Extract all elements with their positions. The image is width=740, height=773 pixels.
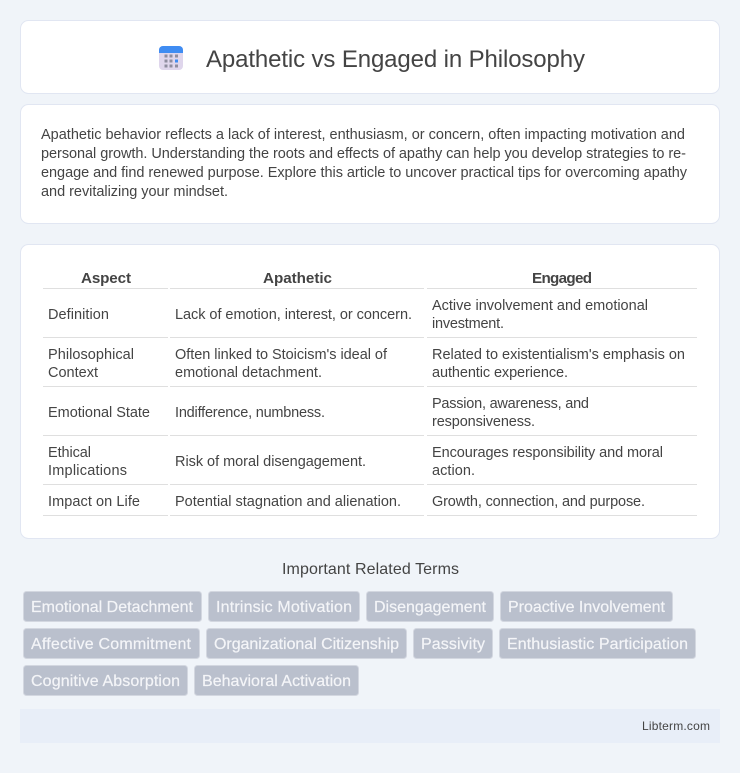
table header: Engaged [532, 270, 592, 287]
table row: philosophical context: authentic experience. [432, 365, 568, 381]
table header: Apathetic [263, 270, 332, 287]
tag [500, 592, 672, 622]
table row: definition: Definition [48, 307, 109, 323]
table row: philosophical context: Context [48, 365, 98, 381]
table header: Aspect [81, 270, 131, 287]
table row: emotional state: Passion, awareness, and [432, 396, 589, 412]
table row: impact on life: Impact on Life [48, 494, 140, 510]
table row: impact on life: Growth, connection, and purpose. [432, 494, 645, 510]
tag [24, 592, 202, 622]
tag: Cognitive Absorption [31, 673, 180, 690]
title: Apathetic vs Engaged in Philosophy [206, 46, 585, 73]
table row: philosophical context: Often linked to Stoicism's ideal of [175, 347, 388, 363]
table row: philosophical context [48, 347, 685, 381]
table row: emotional state: Emotional State [48, 405, 150, 421]
tag: Proactive Involvement [508, 599, 666, 616]
table row: ethical implications: Ethical [48, 445, 91, 461]
tag: Disengagement [374, 599, 487, 616]
table row: philosophical context: emotional detachment. [175, 365, 322, 381]
table row: definition: Active involvement and emotional [432, 298, 648, 314]
tag [366, 592, 494, 622]
table row: emotional state: Indifference, numbness. [175, 405, 325, 421]
table row: ethical implications: Implications [48, 463, 127, 479]
tag: Behavioral Activation [202, 673, 351, 690]
tag [24, 628, 200, 658]
table row: definition [48, 298, 648, 332]
tag: Organizational Citizenship [214, 636, 399, 653]
tag: Passivity [421, 636, 485, 653]
table header [81, 270, 592, 287]
related terms tags [24, 592, 696, 696]
tag: Enthusiastic Participation [507, 636, 688, 653]
icon: calendar [159, 46, 183, 70]
table row: emotional state: responsiveness. [432, 414, 535, 430]
text block: introduction: personal growth. Understanding the roots and effects of apathy can help you develop strategies to re- [41, 146, 686, 162]
table row: ethical implications [48, 445, 663, 479]
tag: Emotional Detachment [31, 599, 194, 616]
table row: ethical implications: Encourages responsibility and moral [432, 445, 663, 461]
table row: philosophical context: Related to existentialism's emphasis on [432, 347, 685, 363]
panel: introduction [20, 104, 720, 224]
table row: ethical implications: action. [432, 463, 475, 479]
panel: header [20, 20, 720, 94]
table row: impact on life: Potential stagnation and alienation. [175, 494, 401, 510]
heading: important related terms: Important Related Terms [282, 561, 459, 578]
table row: philosophical context: Philosophical [48, 347, 134, 363]
tag [206, 628, 406, 658]
table row: impact on life [48, 494, 645, 510]
tag [414, 628, 492, 658]
table row: ethical implications: Risk of moral disengagement. [175, 454, 366, 470]
tag [24, 666, 188, 696]
text block: introduction: Apathetic behavior reflects a lack of interest, enthusiasm, or concern, often impacting motivation and [41, 127, 685, 143]
footer [20, 709, 720, 743]
tag [500, 628, 696, 658]
tag [208, 592, 360, 622]
text block: introduction [41, 127, 688, 200]
panel: comparison table [20, 244, 720, 538]
text block: introduction: engage and find renewed purpose. Explore this article to uncover practical tips for overcoming apathy [41, 165, 688, 181]
table row: definition: Lack of emotion, interest, or concern. [175, 307, 412, 323]
tag [194, 666, 358, 696]
footer credit: Libterm.com [642, 719, 710, 733]
tag: Intrinsic Motivation [216, 599, 352, 616]
table row: definition: investment. [432, 316, 504, 332]
table row: emotional state [48, 396, 589, 430]
text block: introduction: and revitalizing your mindset. [41, 184, 228, 200]
tag: Affective Commitment [31, 636, 192, 653]
